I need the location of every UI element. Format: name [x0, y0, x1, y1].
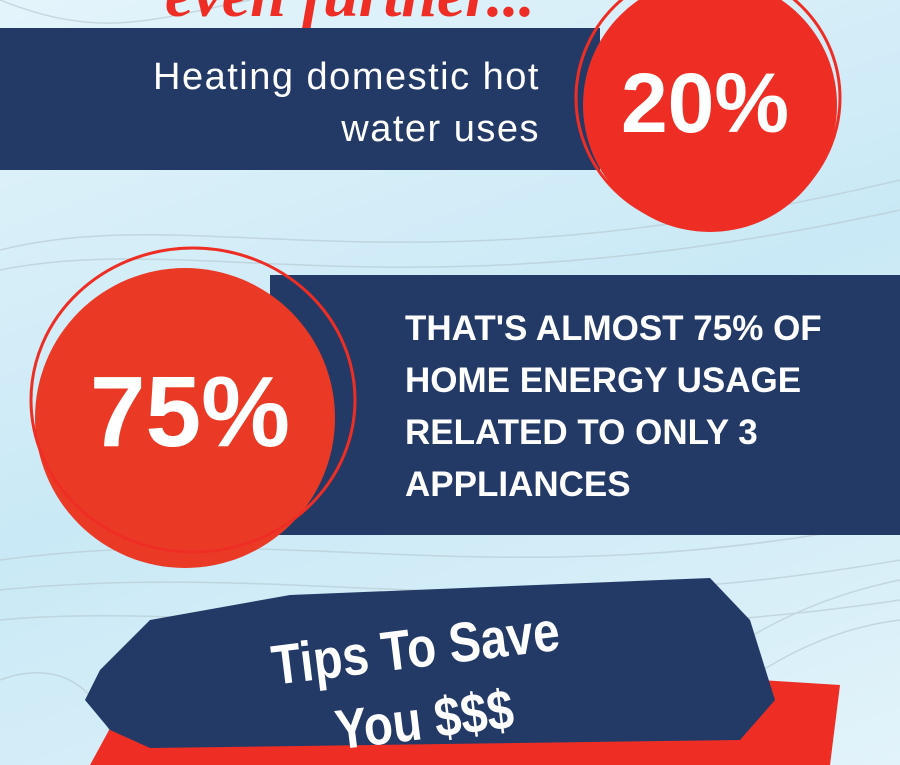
text: tips heading: You $$$ — [332, 677, 517, 761]
text: heating domestic hot water: water uses — [341, 108, 540, 150]
text: heating domestic hot water — [153, 56, 540, 150]
text: 75% explanation: APPLIANCES — [405, 465, 631, 504]
text: 75% explanation — [405, 309, 822, 504]
circle: 75% — [30, 246, 356, 568]
panel: hot water bar — [0, 28, 600, 170]
text: tips heading: Tips To Save — [268, 599, 563, 697]
circle: 20% — [574, 0, 842, 232]
panel: 75% bar — [270, 275, 900, 535]
stat: 75%: 75% — [90, 356, 290, 468]
text: tips heading — [268, 599, 563, 761]
text: 75% explanation: HOME ENERGY USAGE — [405, 361, 801, 400]
text: 75% explanation: THAT'S ALMOST 75% OF — [405, 309, 822, 348]
banner: tips brush — [85, 578, 840, 765]
text: 75% explanation: RELATED TO ONLY 3 — [405, 413, 758, 452]
text: heating domestic hot water: Heating domestic hot — [153, 56, 540, 98]
stat: 20%: 20% — [621, 56, 789, 150]
